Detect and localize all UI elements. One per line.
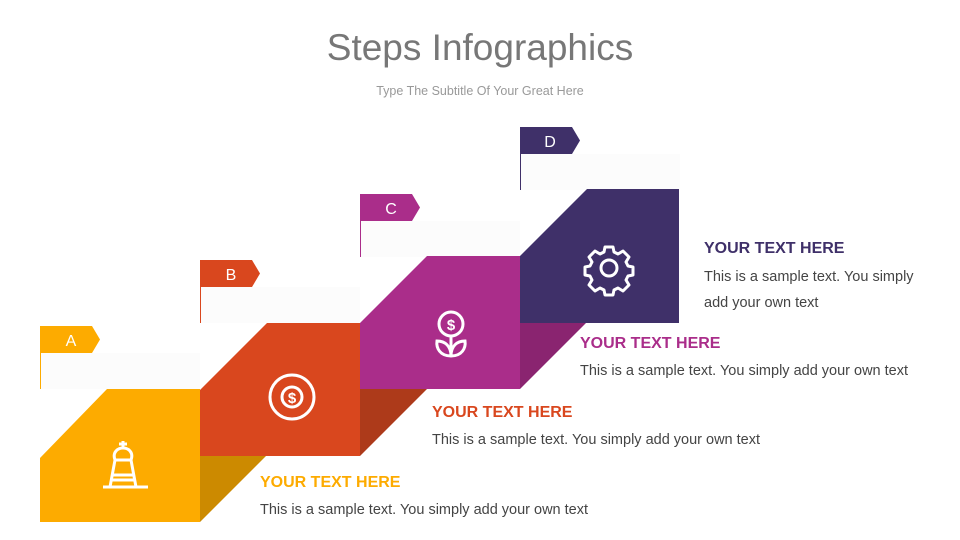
step B: $ (288, 390, 297, 407)
text block B (432, 404, 760, 448)
text block A (260, 474, 588, 518)
step B (200, 260, 427, 456)
step A (40, 326, 267, 522)
text block C: YOUR TEXT HERE (580, 335, 720, 352)
step C: $ (447, 317, 456, 334)
title: Steps Infographics (327, 27, 633, 68)
text block A: This is a sample text. You simply add your own text (260, 502, 588, 518)
subtitle: Type The Subtitle Of Your Great Here (376, 84, 584, 98)
step D: D (544, 134, 556, 151)
step A: A (66, 333, 77, 350)
text block C: This is a sample text. You simply add your own text (580, 363, 908, 379)
text block D: add your own text (704, 295, 818, 311)
text block D: YOUR TEXT HERE (704, 240, 844, 257)
step C: C (385, 201, 397, 218)
text block D: This is a sample text. You simply (704, 269, 914, 285)
text block D (704, 240, 914, 311)
text block B: This is a sample text. You simply add your own text (432, 432, 760, 448)
step B: B (226, 267, 236, 284)
text block C (580, 335, 908, 379)
step C (360, 194, 587, 389)
text block B: YOUR TEXT HERE (432, 404, 572, 421)
text block A: YOUR TEXT HERE (260, 474, 400, 491)
step D (520, 127, 680, 323)
